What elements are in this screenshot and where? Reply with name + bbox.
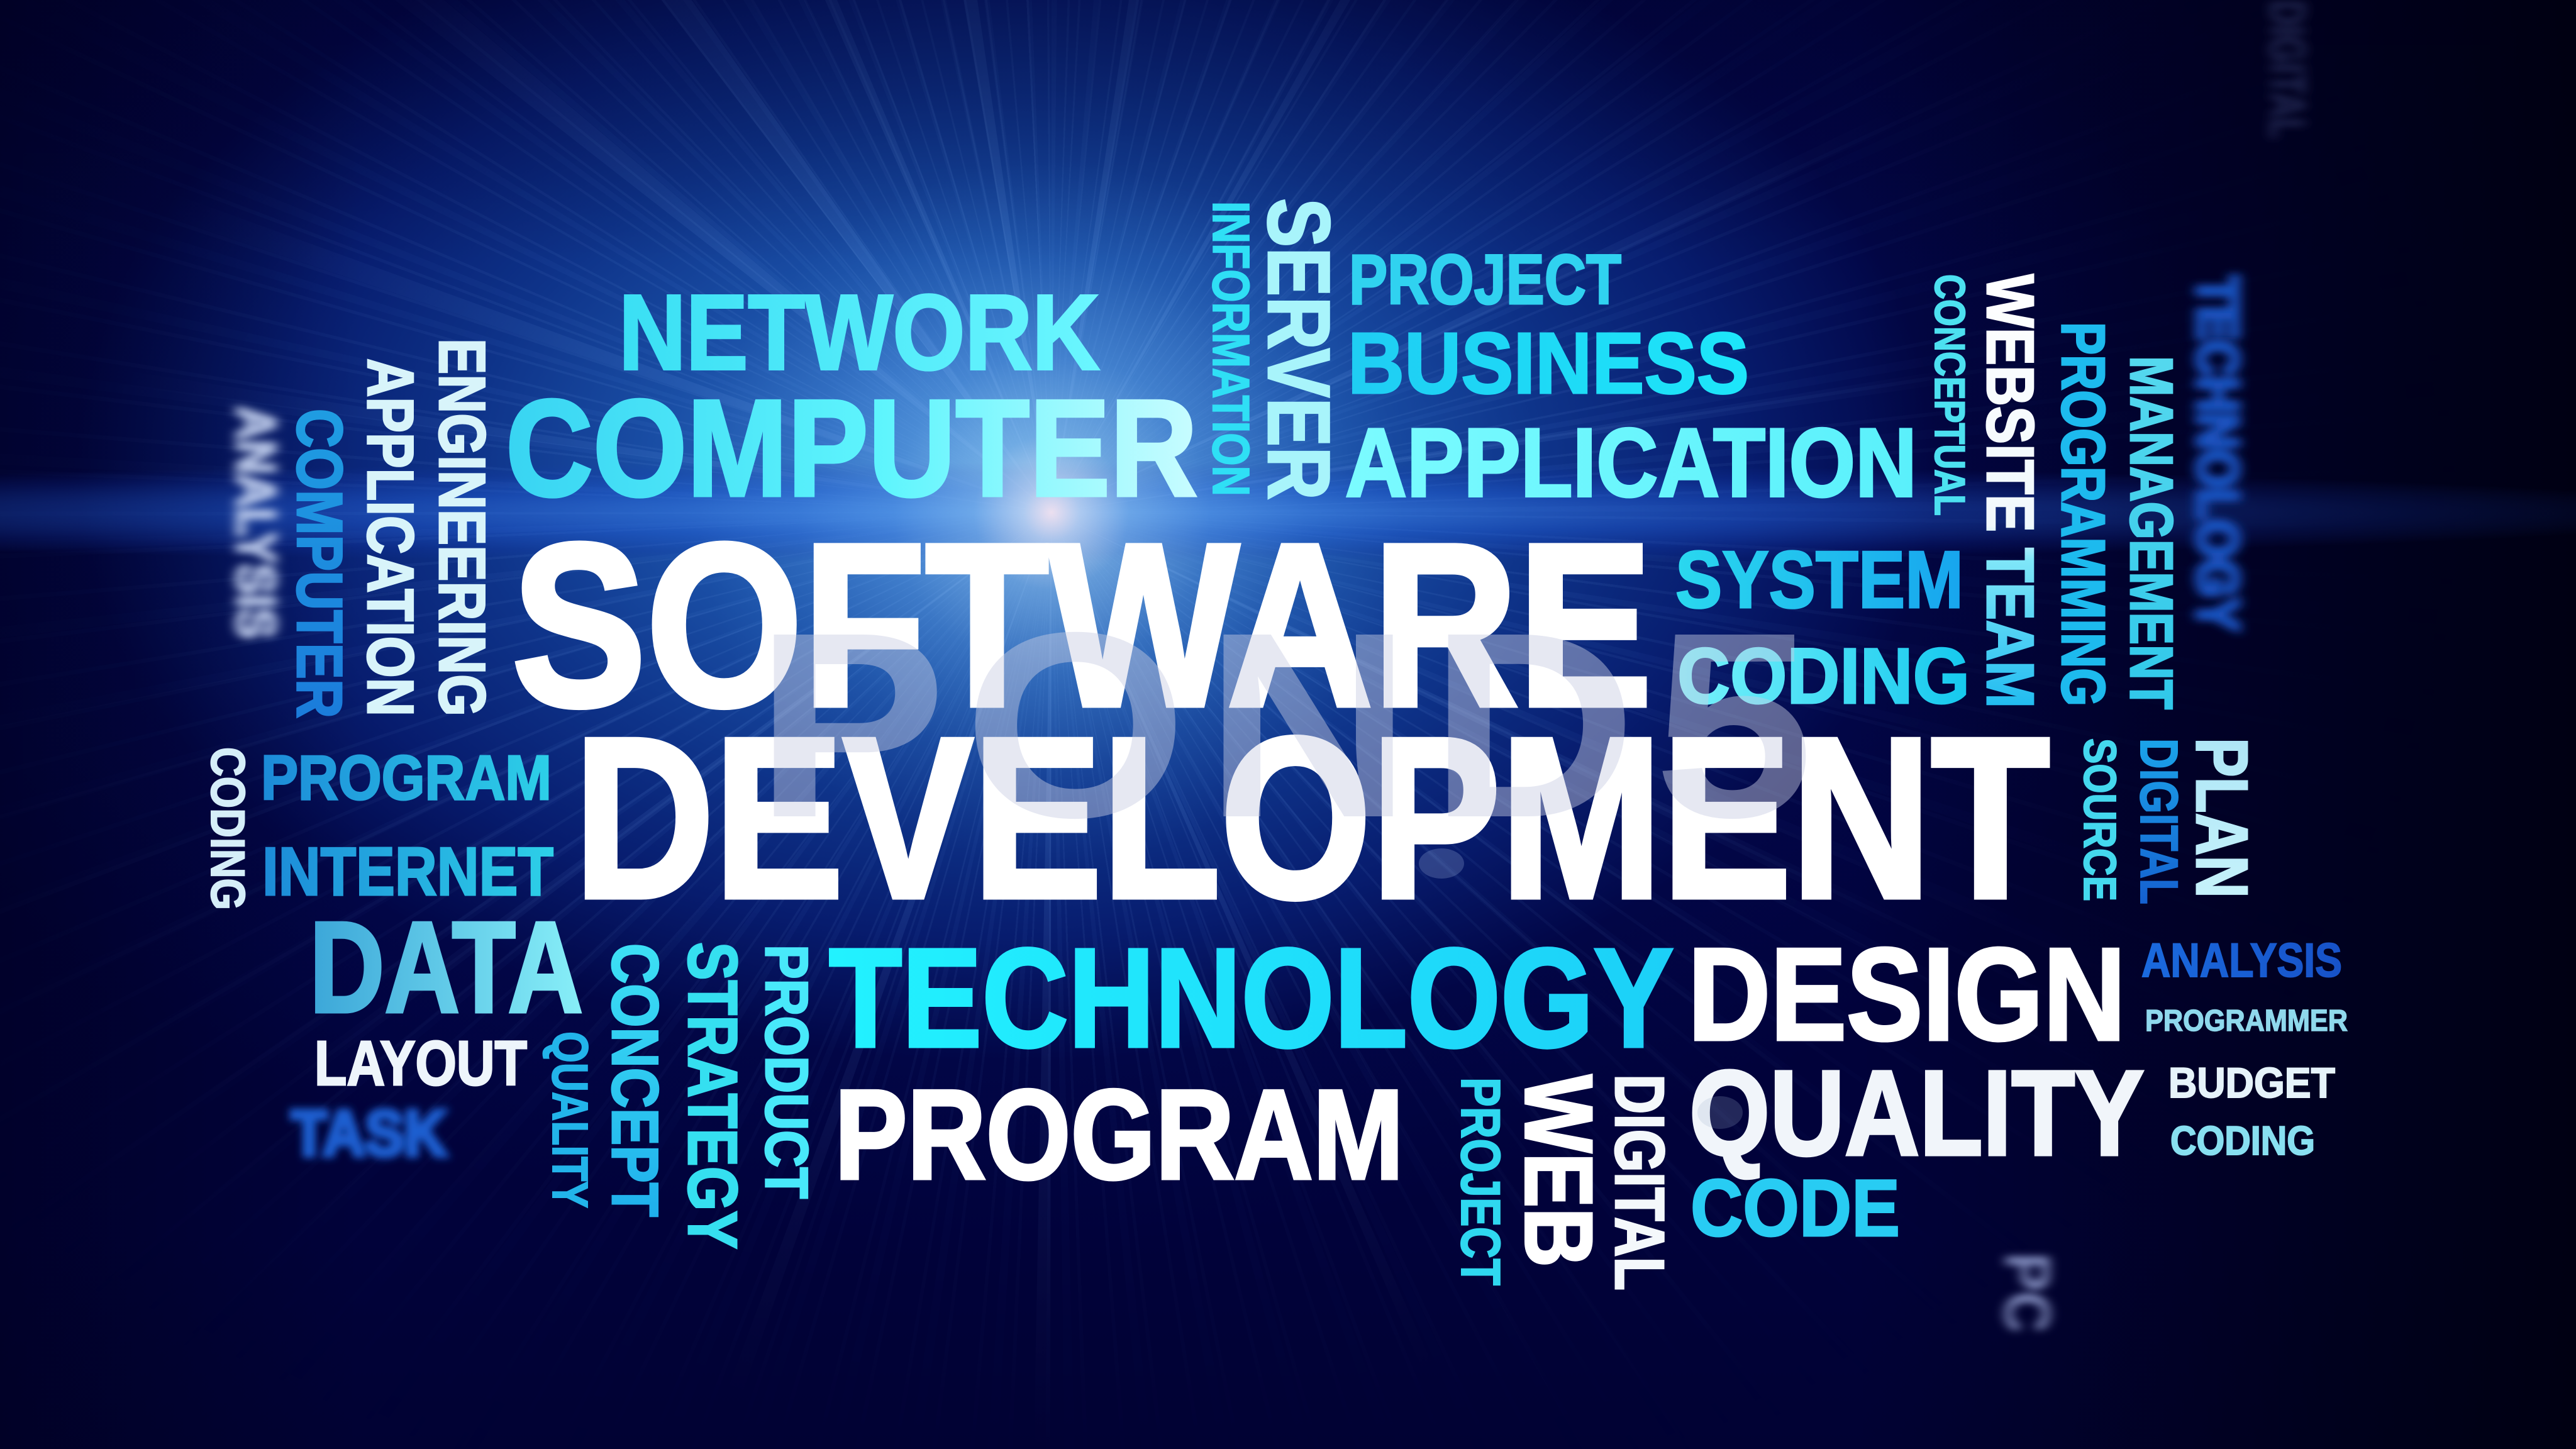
word: WEB vertical: WEB xyxy=(1505,1075,1612,1267)
word: CONCEPTUAL vertical: CONCEPTUAL xyxy=(1926,274,1974,516)
word: INFORMATION vertical: INFORMATION xyxy=(1202,201,1260,496)
word: PROGRAMMING vertical: PROGRAMMING xyxy=(2049,322,2118,706)
word: QUALITY vertical: QUALITY xyxy=(542,1031,598,1208)
word: CODE: CODE xyxy=(1690,1163,1900,1253)
word: APPLICATION: APPLICATION xyxy=(1345,408,1917,517)
word: BUSINESS: BUSINESS xyxy=(1348,315,1749,412)
word: CODING right: CODING xyxy=(1677,633,1970,720)
word: SOURCE vertical: SOURCE xyxy=(2074,738,2124,901)
word: DESIGN: DESIGN xyxy=(1688,921,2126,1068)
word: BUDGET: BUDGET xyxy=(2168,1059,2335,1107)
word: APPLICATION vertical: APPLICATION xyxy=(353,358,426,716)
word: MANAGEMENT vertical: MANAGEMENT xyxy=(2118,356,2185,709)
lens spot xyxy=(1697,1096,1743,1129)
word: LAYOUT: LAYOUT xyxy=(314,1028,527,1099)
word: COMPUTER: COMPUTER xyxy=(506,372,1197,525)
word: CODING vertical left: CODING xyxy=(201,747,254,910)
word: DIGITAL vertical white: DIGITAL xyxy=(1601,1074,1678,1291)
word: NETWORK: NETWORK xyxy=(619,273,1099,392)
word: PROGRAM blue: PROGRAM xyxy=(261,743,552,813)
word: INTERNET: INTERNET xyxy=(262,833,553,910)
word: SYSTEM: SYSTEM xyxy=(1675,535,1963,625)
word: STRATEGY vertical: STRATEGY xyxy=(674,942,751,1249)
word: PLAN vertical: PLAN xyxy=(2181,738,2263,898)
blurred word: ANALYSIS vertical: ANALYSIS xyxy=(226,406,286,639)
word: QUALITY: QUALITY xyxy=(1689,1045,2144,1180)
word: PROGRAMMER: PROGRAMMER xyxy=(2145,1004,2348,1038)
word: DIGITAL vertical blue: DIGITAL xyxy=(2129,738,2189,904)
word: ANALYSIS: ANALYSIS xyxy=(2141,934,2342,987)
blurred word: PC vertical: PC xyxy=(1992,1253,2062,1333)
word: CODING lower right: CODING xyxy=(2170,1118,2315,1163)
word: WEBSITE TEAM vertical: WEBSITE TEAM xyxy=(1973,274,2047,708)
background: radial light rays xyxy=(226,0,1732,1138)
word: PROJECT vertical: PROJECT xyxy=(1450,1077,1512,1285)
word: SOFTWARE: SOFTWARE xyxy=(512,496,1652,754)
watermark: POND5: POND5 xyxy=(755,577,1814,873)
blurred word: TECHNOLOGY vertical: TECHNOLOGY xyxy=(2185,275,2250,631)
word: CONCEPT vertical: CONCEPT xyxy=(598,943,671,1217)
word: DATA: DATA xyxy=(309,895,583,1040)
word: PRODUCT vertical: PRODUCT xyxy=(753,945,820,1199)
blurred word: TASK: TASK xyxy=(291,1097,447,1169)
word: PROGRAM white: PROGRAM xyxy=(835,1063,1404,1206)
faint blurred word: top column: DIGITAL xyxy=(2260,0,2316,140)
word: COMPUTER vertical: COMPUTER xyxy=(284,409,355,718)
word: DEVELOPMENT: DEVELOPMENT xyxy=(574,690,2050,945)
word: SERVER vertical: SERVER xyxy=(1250,198,1348,500)
word: PROJECT: PROJECT xyxy=(1349,240,1621,319)
lens spot xyxy=(1419,848,1464,879)
word: ENGINEERING vertical: ENGINEERING xyxy=(425,338,498,716)
word: TECHNOLOGY: TECHNOLOGY xyxy=(829,919,1674,1077)
